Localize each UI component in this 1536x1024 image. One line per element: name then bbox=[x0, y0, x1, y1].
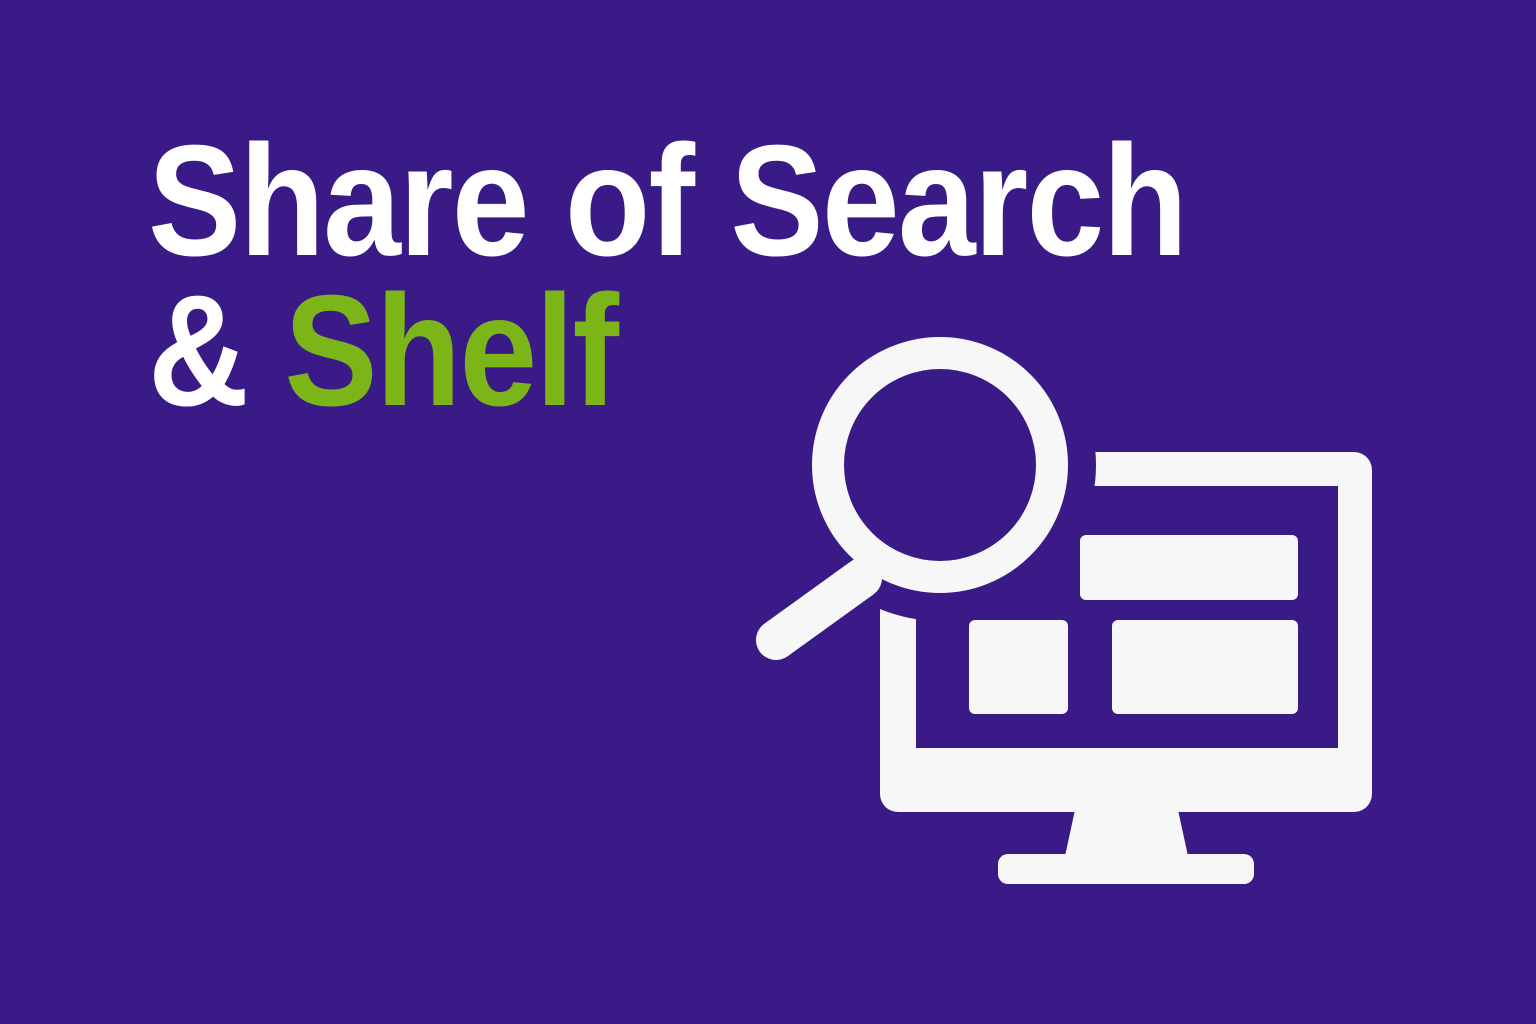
title line 2: & Shelf bbox=[148, 263, 617, 439]
title bbox=[148, 113, 1186, 439]
title line 1: Share of Search bbox=[148, 113, 1186, 289]
icon: magnifier bbox=[776, 309, 1096, 640]
icon: monitor bbox=[880, 452, 1372, 884]
